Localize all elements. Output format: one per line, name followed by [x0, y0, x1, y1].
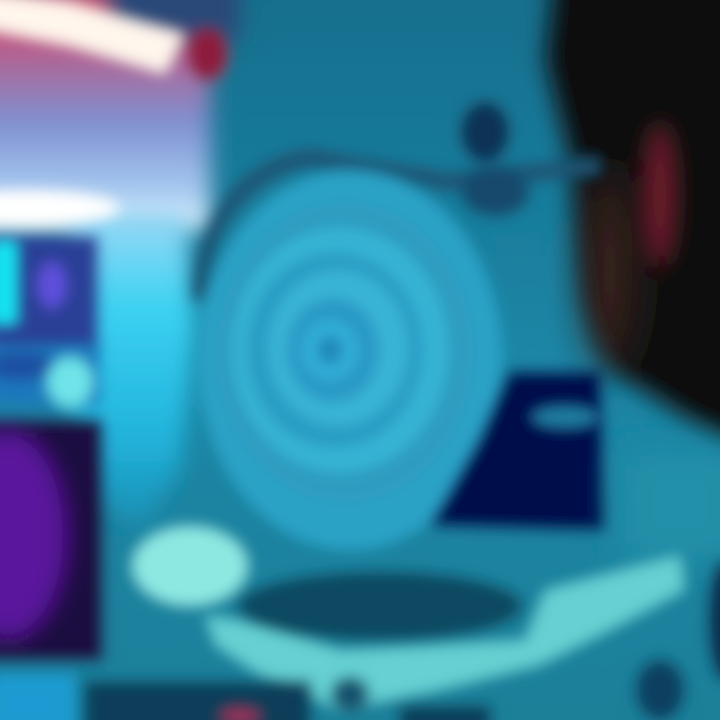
dark arc behind target — [200, 158, 600, 300]
dark oval on desk — [238, 572, 522, 640]
bottom right dark — [636, 560, 720, 720]
neon light bar — [0, 0, 185, 74]
panel: desk — [132, 526, 685, 712]
panel: concentric target — [198, 170, 502, 550]
dark arm — [461, 168, 529, 216]
panel: upper left light wall — [0, 0, 240, 230]
panel: purple speaker — [0, 420, 102, 660]
panel: left screen — [0, 236, 100, 408]
cyan glow column — [70, 210, 195, 530]
white glow left — [0, 190, 120, 226]
lower right teal — [620, 450, 720, 560]
bottom dark strip — [85, 682, 490, 720]
red streak — [644, 123, 676, 267]
panel: dark navy box — [432, 372, 605, 530]
dark knob — [332, 678, 368, 712]
right dark silhouette — [545, 0, 720, 450]
red accent block — [188, 28, 228, 80]
dark blob — [461, 102, 509, 162]
cyan corner bottom left — [0, 674, 76, 720]
